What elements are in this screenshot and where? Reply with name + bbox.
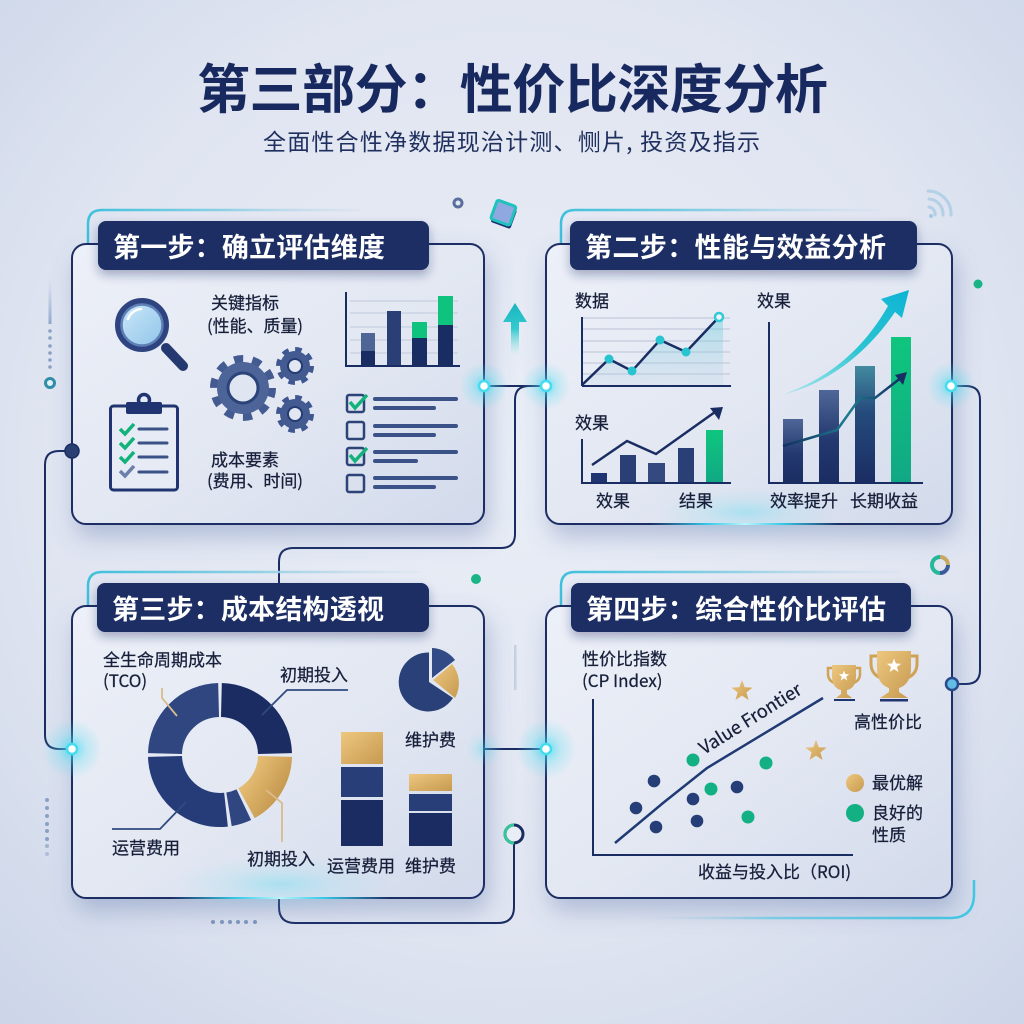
label: effect small chart: 效果 [575,409,609,434]
label: TCO [103,646,222,692]
label: data: 数据 [575,287,609,312]
bottom edge glows [170,488,840,912]
title: 第三部分：性价比深度分析 [197,48,828,124]
step 2 header [570,221,917,270]
labels under large chart: 效率提升 [770,487,838,512]
labels under large chart: 长期收益 [850,487,918,512]
step 3 header [97,583,429,632]
stacked bar labels: 维护费 [405,852,456,877]
pie chart [399,648,459,711]
label: key indicators [207,289,303,337]
step 1 header: 第一步：确立评估维度 [113,226,385,265]
stacked bar labels: 运营费用 [327,852,395,877]
donut chart [165,700,275,810]
labels under small chart: 效果 [596,487,630,512]
panel: step 1 frame [72,244,484,524]
subtitle: 全面性合性净数据现治计测、恻片, 投资及指示 [263,123,760,157]
labels under large chart [770,487,918,512]
legend [846,769,923,846]
panel content: step 1 [98,221,460,492]
scatter chart: Value Frontier [693,676,807,760]
x axis label: 收益与投入比（ROI) [698,858,851,883]
legend: 最优解 [872,769,923,794]
connector nodes [42,362,975,843]
icon: magnifying glass [118,301,183,366]
label: key indicators: (性能、质量) [207,312,303,337]
icon: small trophy [828,665,860,701]
line chart [582,313,731,386]
panel: step 4 frame [546,606,952,898]
step 1 header [98,221,429,270]
large bar chart [769,290,923,483]
labels under small chart [596,487,713,512]
panel: step 3 frame [72,606,484,898]
checklist [347,395,456,492]
icon: large trophy [871,651,917,702]
icon: stars [732,680,826,760]
donut labels: 运营费用 [112,834,180,859]
label: maintenance: 维护费 [405,726,456,751]
label: cost factors [207,446,303,492]
legend: 性质 [872,821,906,846]
panel content: step 2 [570,221,923,512]
step 3 header: 第三步：成本结构透视 [112,588,384,627]
stacked bar labels [327,852,456,877]
label: TCO: (TCO) [103,667,147,692]
panel content: step 3 [97,583,459,877]
stacked bars [341,732,452,846]
icon: gears [214,350,312,430]
donut labels: 初期投入 [247,845,315,870]
y axis label: 性价比指数 [582,645,667,670]
label: cost factors: (费用、时间) [207,467,303,492]
y axis label [582,645,667,692]
y axis label: (CP Index) [582,667,663,692]
step 2 header: 第二步：性能与效益分析 [585,226,886,265]
label: effect large chart: 效果 [757,287,791,312]
label: high value: 高性价比 [854,708,922,733]
scatter chart [593,676,853,855]
label: key indicators: 关键指标 [211,289,279,314]
donut labels: 初期投入 [280,661,348,686]
donut leader lines [112,688,348,842]
bar chart [346,292,460,366]
donut labels [112,661,348,870]
panel content: step 4 [571,583,923,883]
labels under small chart: 结果 [679,487,713,512]
bar chart with trend arrow [582,407,731,483]
label: cost factors: 成本要素 [211,446,279,471]
connector lines behind panels [45,386,980,923]
cyan accent lines [88,210,974,918]
step 4 header: 第四步：综合性价比评估 [586,588,886,627]
panel: step 2 frame [546,244,952,524]
legend: 良好的 [872,799,923,824]
label: TCO: 全生命周期成本 [103,646,222,671]
icon: clipboard [110,394,178,490]
decorative icons [45,191,982,924]
icon: up arrow between panels [503,303,527,355]
